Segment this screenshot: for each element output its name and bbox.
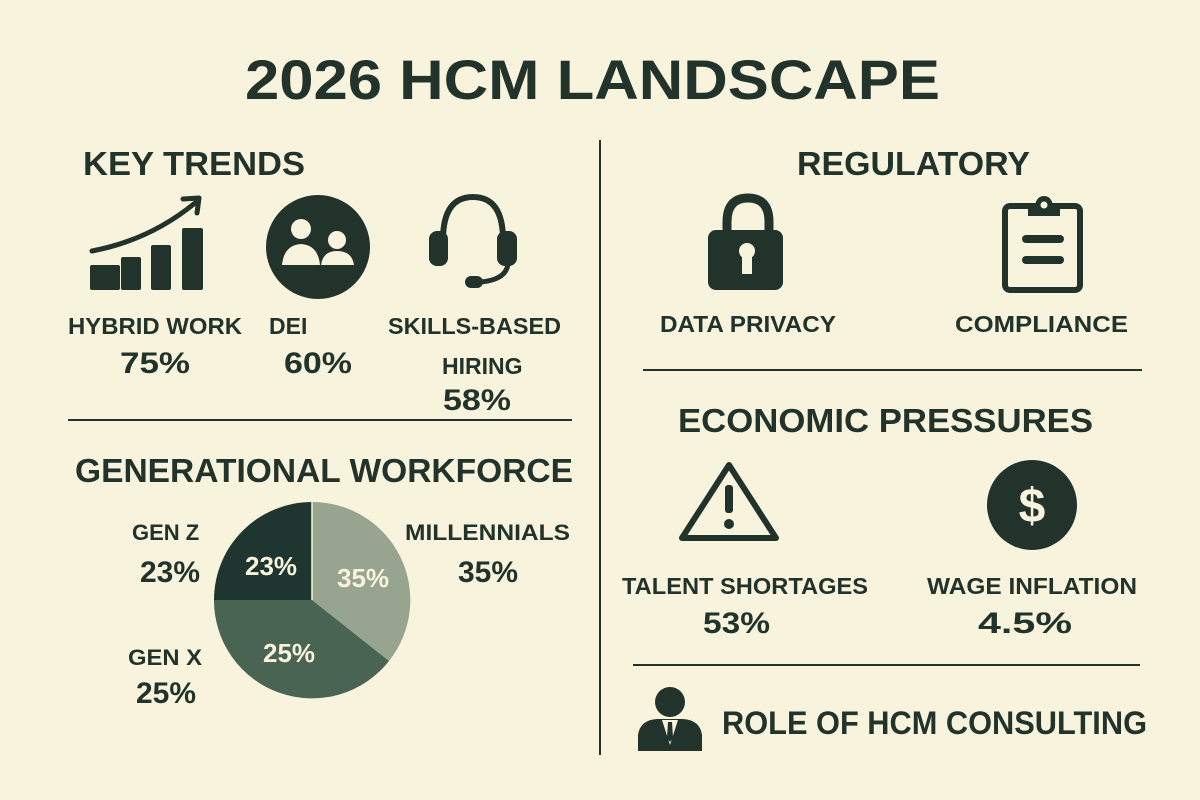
panel: generational workforce bbox=[75, 452, 573, 710]
text: skills-based hiring: 58% bbox=[443, 384, 511, 417]
text: dei bbox=[269, 313, 352, 380]
text: skills-based hiring: SKILLS-BASED bbox=[388, 313, 561, 339]
text: hybrid work: 75% bbox=[120, 347, 190, 380]
panel: role of hcm consulting bbox=[638, 687, 1147, 751]
text: hybrid work: HYBRID WORK bbox=[68, 313, 242, 339]
pie chart: 23% bbox=[245, 551, 297, 581]
text: compliance: COMPLIANCE bbox=[955, 311, 1128, 337]
text: talent shortages: 53% bbox=[703, 607, 770, 640]
text: dei: 60% bbox=[284, 347, 352, 380]
pie chart: 25% bbox=[263, 638, 315, 668]
pie chart bbox=[214, 502, 410, 698]
icon: warning triangle bbox=[682, 465, 776, 538]
heading: generational workforce: GENERATIONAL WORKFORCE bbox=[75, 452, 573, 489]
text: hybrid work bbox=[68, 313, 242, 380]
label: gen x: GEN X bbox=[128, 645, 202, 670]
label: millennials bbox=[405, 520, 570, 589]
icon: growth bar chart bbox=[90, 198, 203, 290]
title: 2026 HCM LANDSCAPE bbox=[245, 48, 940, 111]
icon: dollar circle bbox=[987, 460, 1077, 550]
text: dei: DEI bbox=[269, 313, 307, 339]
panel: regulatory bbox=[660, 145, 1128, 337]
label: millennials: MILLENNIALS bbox=[405, 520, 570, 545]
label: millennials: 35% bbox=[458, 556, 518, 589]
heading: regulatory: REGULATORY bbox=[797, 145, 1030, 182]
icon: consultant person bbox=[638, 687, 702, 751]
panel: economic pressures bbox=[622, 402, 1137, 640]
icon: lock bbox=[708, 198, 783, 290]
heading: key trends: KEY TRENDS bbox=[83, 145, 305, 182]
text: skills-based hiring: HIRING bbox=[442, 353, 522, 379]
label: gen x bbox=[128, 645, 202, 710]
text: skills-based hiring bbox=[388, 313, 561, 417]
label: gen z: 23% bbox=[140, 556, 200, 589]
icon: dollar circle: $ bbox=[1019, 480, 1046, 533]
label: gen x: 25% bbox=[136, 677, 196, 710]
label: gen z: GEN Z bbox=[132, 520, 199, 545]
icon: people circle bbox=[266, 195, 370, 299]
icon: headset bbox=[429, 197, 517, 288]
text: wage inflation bbox=[927, 573, 1137, 640]
panel: key trends bbox=[68, 145, 561, 417]
text: talent shortages: TALENT SHORTAGES bbox=[622, 573, 868, 599]
text: wage inflation: WAGE INFLATION bbox=[927, 573, 1137, 599]
text: wage inflation: 4.5% bbox=[978, 607, 1072, 640]
text: data privacy: DATA PRIVACY bbox=[660, 311, 836, 337]
heading: economic pressures: ECONOMIC PRESSURES bbox=[678, 402, 1093, 439]
icon: clipboard bbox=[1005, 196, 1080, 290]
text: talent shortages bbox=[622, 573, 868, 640]
text: role of hcm consulting: ROLE OF HCM CONSULTING bbox=[722, 705, 1147, 741]
label: gen z bbox=[132, 520, 200, 589]
pie chart: 35% bbox=[337, 563, 389, 593]
